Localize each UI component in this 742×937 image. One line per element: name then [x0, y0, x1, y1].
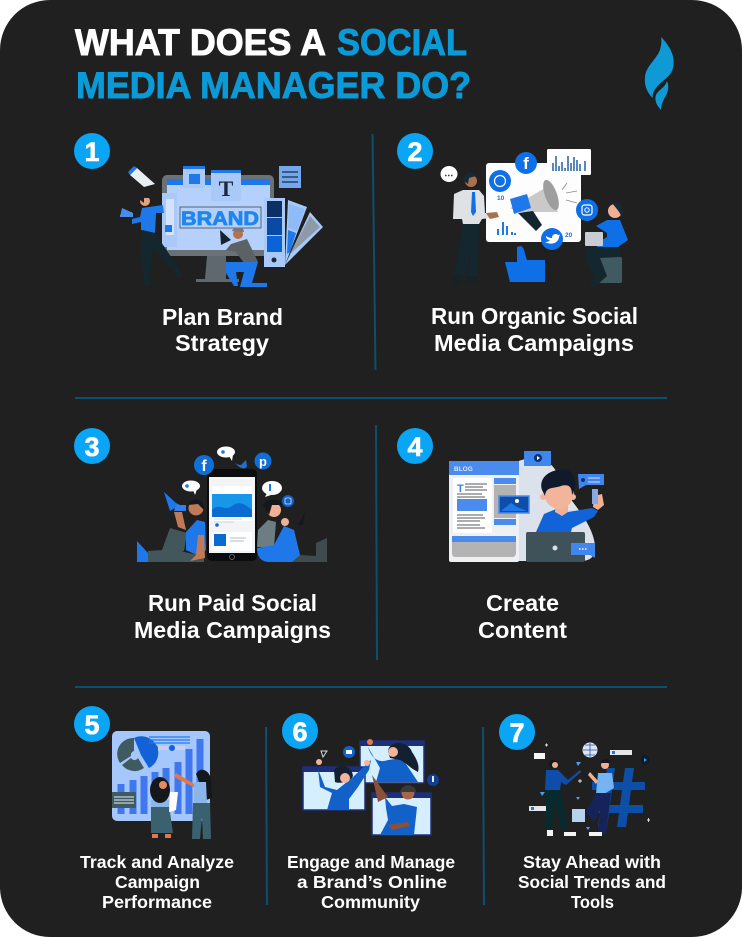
label: create content	[478, 590, 567, 643]
label: engage and manage a brand's online community: a Brand’s Online	[297, 872, 447, 892]
label: stay ahead with social trends and tools	[518, 852, 666, 912]
illustration: blogger at laptop	[449, 451, 604, 562]
illustration: megaphone and social icons: 10	[497, 195, 505, 202]
label: plan brand strategy: Strategy	[175, 330, 269, 356]
illustration: blogger at laptop: BLOG	[454, 466, 473, 473]
illustration: brand monitor: BRAND	[181, 209, 259, 230]
illustration: phone and two people	[137, 446, 327, 562]
label: run organic social media campaigns	[431, 303, 638, 356]
panel: engage and manage a brand's online community	[282, 713, 455, 912]
icon: twitter	[541, 228, 563, 250]
label: run paid social media campaigns	[134, 590, 331, 643]
number badge 5: 5	[84, 710, 100, 740]
speech bubbles	[182, 446, 282, 497]
icon: facebook	[194, 455, 214, 475]
title: WHAT DOES A	[75, 22, 326, 63]
icon: video	[343, 746, 355, 758]
label: create content: Content	[478, 617, 567, 643]
icon: flame logo	[645, 37, 674, 110]
illustration: megaphone and social icons	[440, 149, 628, 287]
label: track and analyze campaign performance: Track and Analyze	[80, 852, 234, 872]
number badge 2	[397, 133, 433, 169]
dividers	[75, 134, 667, 905]
title: MEDIA MANAGER DO?	[76, 65, 471, 106]
illustration: brand monitor	[120, 166, 323, 287]
number badge 4	[397, 428, 433, 464]
number badge 4: 4	[407, 432, 423, 462]
label: track and analyze campaign performance: Campaign	[115, 872, 200, 892]
icon: whatsapp	[489, 170, 511, 192]
number badge 1: 1	[84, 137, 100, 167]
label: stay ahead with social trends and tools: Tools	[571, 892, 614, 912]
number badge 3	[74, 428, 110, 464]
label: plan brand strategy: Plan Brand	[162, 304, 283, 330]
icon: microphone	[427, 774, 439, 786]
number badge 6	[282, 713, 318, 749]
label: engage and manage a brand's online community: Engage and Manage	[287, 852, 455, 872]
icon: instagram	[576, 199, 598, 221]
speech bubble	[440, 166, 458, 182]
label: stay ahead with social trends and tools: Stay Ahead with	[523, 852, 661, 872]
icon: pinterest	[254, 452, 272, 470]
panel: run paid social media campaigns	[74, 428, 331, 643]
panel: stay ahead with social trends and tools	[499, 714, 666, 912]
label: track and analyze campaign performance	[80, 852, 234, 912]
number badge 6: 6	[292, 717, 308, 747]
icon: facebook: f	[523, 154, 529, 173]
icon: hashtag	[590, 768, 645, 827]
number badge 7: 7	[509, 718, 525, 748]
number badge 2: 2	[407, 137, 423, 167]
illustration: brand monitor: T	[219, 176, 234, 201]
label: track and analyze campaign performance: Performance	[102, 892, 212, 912]
number badge 7	[499, 714, 535, 750]
icon: twitter bird	[235, 460, 247, 468]
label: run paid social media campaigns: Run Paid Social	[148, 590, 317, 616]
icon: pinterest: p	[259, 454, 267, 469]
label: stay ahead with social trends and tools: Social Trends and	[518, 872, 666, 892]
illustration: video call windows	[303, 739, 439, 835]
panel: create content	[397, 428, 604, 643]
number badge 1	[74, 133, 110, 169]
illustration: hashtag and two people	[529, 742, 650, 836]
label: engage and manage a brand's online community: Community	[321, 892, 420, 912]
icon: facebook	[515, 152, 537, 174]
icon: facebook: f	[201, 458, 207, 475]
label: run organic social media campaigns: Media Campaigns	[434, 330, 634, 356]
label: create content: Create	[486, 590, 559, 616]
number badge 3: 3	[84, 432, 100, 462]
panel: plan brand strategy	[74, 133, 323, 356]
number badge 5	[74, 706, 110, 742]
illustration: blogger at laptop: T	[457, 483, 464, 495]
label: run organic social media campaigns: Run Organic Social	[431, 303, 638, 329]
label: run paid social media campaigns: Media Campaigns	[134, 617, 331, 643]
title: SOCIAL	[337, 22, 467, 63]
label: engage and manage a brand's online community	[287, 852, 455, 912]
panel: run organic social media campaigns	[397, 133, 638, 356]
panel: track and analyze campaign performance	[74, 706, 234, 912]
icon: instagram	[282, 495, 294, 507]
illustration: analytics dashboard	[112, 731, 212, 839]
label: plan brand strategy	[162, 304, 283, 356]
title	[75, 22, 471, 106]
illustration: megaphone and social icons: 20	[565, 232, 573, 239]
